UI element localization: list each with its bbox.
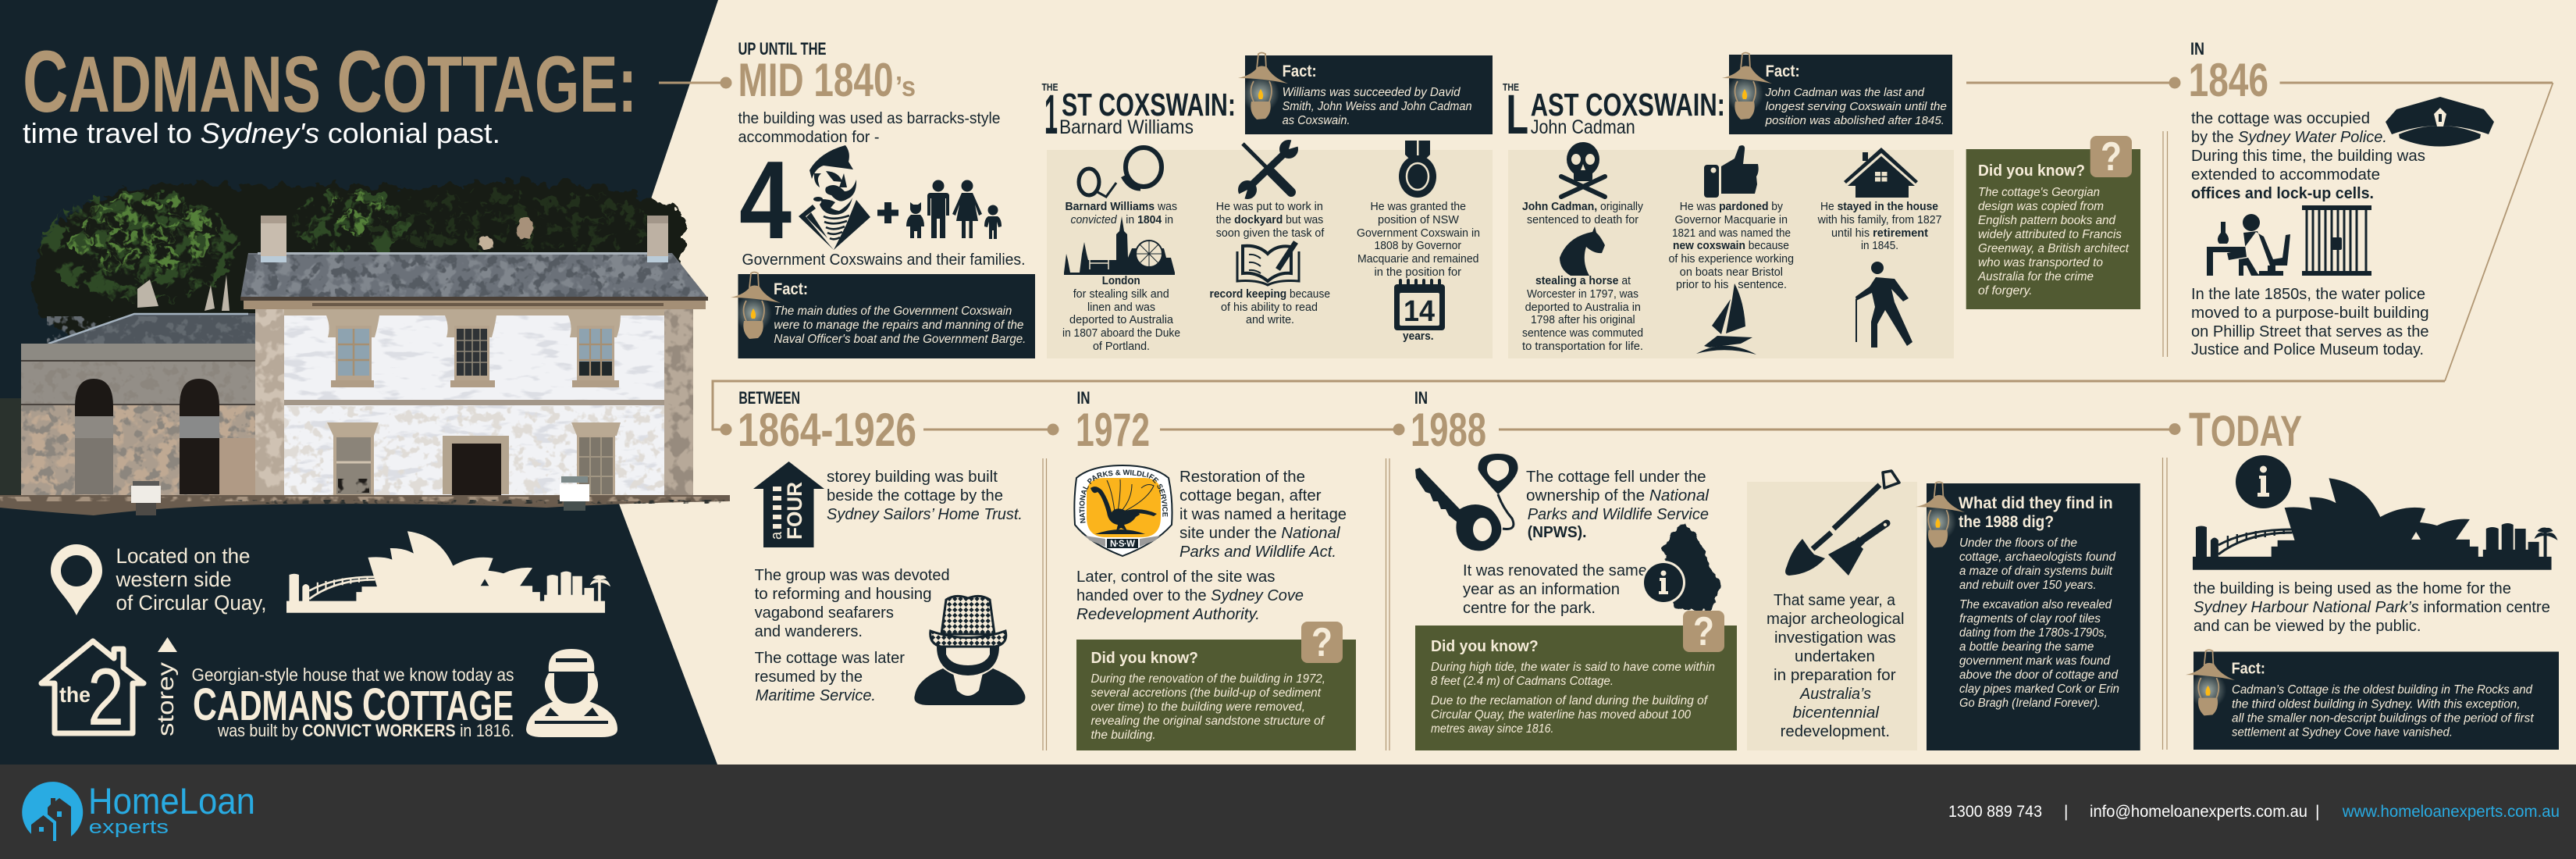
fact box: settlement at Sydney Cove have vanished. xyxy=(2232,726,2453,739)
heading: MID 1840 xyxy=(738,54,893,106)
body text: storey building was built xyxy=(827,468,998,486)
heading xyxy=(1041,81,1236,146)
panel: what did they find: The excavation also revealed xyxy=(1959,598,2112,611)
connector: 1988 to today xyxy=(1499,423,2181,435)
location text: western side xyxy=(116,568,231,591)
body text xyxy=(738,109,1026,269)
panel text: investigation was xyxy=(1774,629,1896,647)
icon: family xyxy=(906,180,1002,239)
body text: centre for the park. xyxy=(1463,599,1596,617)
fact box xyxy=(731,272,1035,358)
did you know: high tide: During high tide, the water is said to have come within xyxy=(1431,661,1715,674)
fact box: Fact: xyxy=(774,280,808,298)
column: pardoned: on boats near Bristol xyxy=(1680,266,1783,279)
heading xyxy=(1411,388,1486,456)
location block xyxy=(51,531,610,615)
fact box: The main duties of the Government Coxswain xyxy=(774,305,1012,318)
heading: Barnard Williams xyxy=(1059,116,1194,138)
icon: question badge: ? xyxy=(2101,134,2122,180)
did you know: high tide: Due to the reclamation of land during the building of xyxy=(1431,694,1709,708)
heading: ST COXSWAIN: xyxy=(1062,87,1236,123)
icon: lantern xyxy=(1238,53,1288,119)
body text: by the Sydney Water Police. xyxy=(2191,128,2387,146)
heading: TODAY xyxy=(2189,403,2302,456)
dark chevron panel xyxy=(0,0,718,765)
icon: opera house skyline dark xyxy=(2193,478,2558,570)
icon: thumbs up xyxy=(1704,145,1759,198)
footer contact details xyxy=(1948,803,2560,821)
column: granted position: Macquarie and remained xyxy=(1357,253,1478,266)
statement text xyxy=(192,665,514,740)
did you know: accretions: several accretions (the build-up of sediment xyxy=(1091,686,1322,700)
icon: pirate coxswain xyxy=(799,145,870,250)
column: stealing a horse: to transportation for life. xyxy=(1522,340,1643,353)
icon: tree with info xyxy=(1642,523,1720,611)
icon: four storey arrow: FOUR xyxy=(783,482,806,540)
column: convicted: deported to Australia xyxy=(1069,314,1174,326)
did you know: accretions: During the renovation of the building in 1972, xyxy=(1091,672,1325,686)
title: CADMANS COTTAGE: xyxy=(23,33,637,130)
upper windows xyxy=(331,326,619,387)
body text: ownership of the National xyxy=(1526,487,1710,504)
heading: IN xyxy=(1077,388,1090,408)
heading: THE xyxy=(1041,81,1059,93)
fact box: Naval Officer's boat and the Government Barge. xyxy=(774,333,1026,346)
column: dockyard: record keeping because xyxy=(1210,288,1330,301)
column: retirement xyxy=(1817,148,1942,348)
panel text xyxy=(1767,591,1905,740)
section: in 1972 xyxy=(1042,388,1356,750)
heading: AST COXSWAIN: xyxy=(1531,87,1725,123)
statement text: Georgian-style house that we know today as xyxy=(192,665,514,685)
panel: what did they find: and rebuilt over 150 years. xyxy=(1959,579,2097,592)
chimneys xyxy=(261,216,286,262)
body text: Later, control of the site was xyxy=(1076,568,1276,586)
section: in 1988 xyxy=(1386,388,2140,750)
column: granted position: in the position for xyxy=(1374,266,1461,279)
subtitle: time travel to Sydney's colonial past. xyxy=(23,117,500,149)
body text: and wanderers. xyxy=(755,622,863,640)
did you know: georgian design: Australia for the crime xyxy=(1977,270,2094,283)
number 4: 4 xyxy=(739,138,792,262)
body text: accommodation for - xyxy=(738,128,879,146)
column: granted position: 1808 by Governor xyxy=(1374,240,1461,252)
icon: shovel and trowel xyxy=(1785,471,1899,576)
footer bar xyxy=(0,765,2576,859)
footer contact details: | xyxy=(2315,803,2319,821)
column: granted position xyxy=(1357,141,1480,343)
body text xyxy=(1463,468,1710,617)
panel text: Australia’s xyxy=(1799,685,1871,703)
icon: jail bars xyxy=(2302,205,2371,276)
fact box: Cadman’s Cottage is the oldest building in The Rocks and xyxy=(2232,683,2533,697)
did you know: georgian design: who was transported to xyxy=(1978,256,2103,269)
fact box: longest serving Coxswain until the xyxy=(1766,100,1947,113)
statement text: was built by CONVICT WORKERS in 1816. xyxy=(217,721,514,740)
icon: question badge xyxy=(1683,609,1724,654)
did you know: georgian design: Greenway, a British architect xyxy=(1978,242,2129,255)
heading: 1972 xyxy=(1076,404,1150,456)
stable arches xyxy=(75,379,255,496)
heading: THE xyxy=(1503,81,1519,93)
body text: the cottage was occupied xyxy=(2191,109,2370,127)
heading: ’s xyxy=(895,70,916,102)
the 2 label: 2 xyxy=(87,652,124,743)
heading: 1864-1926 xyxy=(738,404,916,456)
location text xyxy=(116,544,267,615)
icon: question badge xyxy=(2090,134,2132,180)
footer contact details: | xyxy=(2064,803,2068,821)
heading: 1988 xyxy=(1411,404,1486,456)
panel: what did they find: a bottle bearing the same xyxy=(1959,640,2094,654)
heading xyxy=(2189,39,2268,106)
body text: beside the cottage by the xyxy=(827,487,1003,504)
the 2 label: the xyxy=(59,683,91,707)
did you know: accretions: revealing the original sandstone structure of xyxy=(1091,715,1325,728)
column: retirement: until his retirement xyxy=(1831,227,1928,240)
icon: map pin xyxy=(51,544,102,615)
body text: In the late 1850s, the water police xyxy=(2191,285,2425,303)
icon: question badge xyxy=(1301,620,1343,665)
heading xyxy=(1503,81,1725,146)
column: convicted: of Portland. xyxy=(1093,340,1150,353)
panel: what did they find: dating from the 1780s-1790s, xyxy=(1959,626,2108,640)
body text: year as an information xyxy=(1463,580,1620,598)
column: convicted: linen and was xyxy=(1087,301,1155,314)
illustration: cottage with trees xyxy=(0,181,730,515)
column: dockyard: the dockyard but was xyxy=(1216,214,1323,226)
icon: question badge: ? xyxy=(1311,620,1332,665)
icon: info circle xyxy=(2236,455,2291,508)
panel: what did they find: Under the floors of the xyxy=(1959,536,2077,550)
column: convicted: convicted in 1804 in xyxy=(1071,214,1173,226)
logo wordmark: HomeLoan xyxy=(88,780,255,822)
fact box: Smith, John Weiss and John Cadman xyxy=(1283,100,1472,113)
body text: During this time, the building was xyxy=(2191,147,2425,165)
body text xyxy=(2194,579,2550,635)
body text: Restoration of the xyxy=(1179,468,1305,486)
timeline connector: upper row to lower row xyxy=(713,77,2553,436)
panel: what did they find xyxy=(1916,482,2140,750)
fact box: Fact: xyxy=(2232,661,2265,678)
column: stealing a horse: stealing a horse at xyxy=(1535,275,1631,287)
column: granted position: years. xyxy=(1403,330,1433,343)
column: granted position: He was granted the xyxy=(1371,201,1466,213)
column: pardoned: of his experience working xyxy=(1669,253,1794,266)
logo: national parks and wildlife service: NATIONAL PARKS & WILDLIFE SERVICE xyxy=(1079,470,1168,523)
body text: The cottage was later xyxy=(755,649,905,667)
panel: what did they find: clay pipes marked Cork or Erin xyxy=(1959,683,2119,696)
icon: house xyxy=(1844,148,1918,198)
plus sign xyxy=(877,202,898,223)
panel: what did they find: above the door of cottage and xyxy=(1959,668,2119,682)
fact box: as Coxswain. xyxy=(1283,114,1350,127)
icon: house outline xyxy=(41,641,144,733)
icon: handcuffs xyxy=(1079,148,1162,197)
column: dockyard: of his ability to read xyxy=(1221,301,1318,314)
column: stealing a horse xyxy=(1522,142,1644,353)
did you know: accretions xyxy=(1076,620,1356,750)
column: convicted: Barnard Williams was xyxy=(1065,201,1177,213)
did you know: georgian design: The cottage's Georgian xyxy=(1978,186,2100,199)
body text: extended to accommodate xyxy=(2191,166,2380,184)
column: dockyard: He was put to work in xyxy=(1216,201,1323,213)
column: stealing a horse: John Cadman, originally xyxy=(1522,201,1644,213)
fact box: Fact: xyxy=(1283,62,1317,80)
panel: archeological investigation xyxy=(1747,471,1917,750)
icon: convict xyxy=(526,649,617,737)
panel: what did they find: fragments of clay roof tiles xyxy=(1959,612,2101,626)
body text: Government Coxswains and their families. xyxy=(742,251,1026,269)
logo wordmark: experts xyxy=(89,817,169,838)
heading: UP UNTIL THE xyxy=(738,39,826,59)
panel: what did they find: government mark was found xyxy=(1959,654,2111,668)
location text: of Circular Quay, xyxy=(116,591,267,615)
heading: 1846 xyxy=(2189,54,2268,106)
body text: The cottage fell under the xyxy=(1526,468,1706,486)
icon: lantern xyxy=(1722,53,1772,119)
icon: london skyline xyxy=(1064,216,1175,275)
storey arrow xyxy=(153,637,179,736)
icon: horse head xyxy=(1560,226,1605,276)
did you know: georgian design: English pattern books and xyxy=(1978,214,2116,227)
lower windows and door xyxy=(327,422,621,496)
body text xyxy=(2191,109,2429,358)
fact box xyxy=(1238,53,1493,134)
panel background xyxy=(1047,150,1493,358)
two storey house statement xyxy=(41,637,617,743)
did you know: georgian design: Did you know? xyxy=(1978,162,2085,180)
fact box: were to manage the repairs and manning of the xyxy=(774,319,1024,332)
panel: what did they find: the 1988 dig? xyxy=(1959,513,2054,531)
did you know: high tide: Did you know? xyxy=(1431,638,1539,655)
did you know: high tide: Circular Quay, the waterline has moved about 100 xyxy=(1431,708,1691,722)
body text: the building is being used as the home for the xyxy=(2194,579,2511,597)
fact box: the third oldest building in Sydney. With this exception, xyxy=(2232,698,2521,711)
panel: what did they find: cottage, archaeologists found xyxy=(1959,551,2116,564)
logo: national parks and wildlife service xyxy=(1073,465,1172,558)
icon: police cap xyxy=(2386,97,2494,147)
column: convicted xyxy=(1062,148,1180,353)
section: in 1846 xyxy=(2163,39,2494,358)
did you know: georgian design: design was copied from xyxy=(1978,200,2104,213)
icon: book and pencil xyxy=(1237,242,1299,285)
icon: opera house skyline light xyxy=(286,531,610,613)
icon: question badge: ? xyxy=(1693,609,1714,654)
did you know: georgian design xyxy=(1966,134,2140,309)
column: dockyard: and write. xyxy=(1246,314,1294,326)
section: today xyxy=(2162,403,2559,750)
column: pardoned: He was pardoned by xyxy=(1680,201,1784,213)
ground xyxy=(0,495,730,515)
section: between 1864-1926 xyxy=(738,388,1025,705)
column: dockyard: soon given the task of xyxy=(1216,227,1325,240)
body text: The group was was devoted xyxy=(755,566,950,584)
the 2 label xyxy=(59,652,124,743)
section: first coxswain xyxy=(1041,53,1493,358)
body text: Sydney Sailors’ Home Trust. xyxy=(827,505,1023,523)
panel text: undertaken xyxy=(1795,647,1875,665)
body text: Redevelopment Authority. xyxy=(1076,605,1260,623)
column: pardoned xyxy=(1669,145,1794,355)
column: pardoned: 1821 and was named the xyxy=(1672,227,1791,240)
column: stealing a horse: sentence was commuted xyxy=(1522,327,1643,340)
heading xyxy=(738,388,916,456)
column: granted position: Government Coxswain in xyxy=(1357,227,1480,240)
connector: 1972 to 1988 xyxy=(1160,423,1405,436)
icon: four storey arrow xyxy=(753,462,824,547)
body text: to reforming and housing xyxy=(755,585,932,603)
body text xyxy=(755,468,1023,704)
statement text: CADMANS COTTAGE xyxy=(193,679,514,730)
panel text: bicentennial xyxy=(1793,704,1880,722)
main building walls xyxy=(255,309,693,496)
icon: man at desk xyxy=(2207,214,2290,276)
body text: Parks and Wildlife Act. xyxy=(1179,543,1336,561)
column: stealing a horse: deported to Australia in xyxy=(1525,301,1641,314)
body text: resumed by the xyxy=(755,668,863,686)
column: pardoned: prior to his sentence. xyxy=(1676,279,1787,291)
did you know: high tide: metres away since 1816. xyxy=(1431,722,1553,736)
heading xyxy=(1076,388,1150,456)
body text: It was renovated the same xyxy=(1463,561,1647,579)
fact box: Fact: xyxy=(1766,62,1800,80)
icon: calendar 14: 14 xyxy=(1404,295,1435,328)
icon: lantern xyxy=(1916,482,1965,547)
section: last coxswain xyxy=(1503,53,1954,358)
connector: title to timeline xyxy=(659,77,732,89)
icon: skull and crossbones xyxy=(1561,142,1605,197)
footer contact details: info@homeloanexperts.com.au xyxy=(2090,803,2307,821)
column: convicted: in 1807 aboard the Duke xyxy=(1062,327,1180,340)
fact box xyxy=(2186,650,2559,750)
body text: site under the National xyxy=(1179,524,1341,542)
panel text: in preparation for xyxy=(1774,666,1896,684)
icon: walking man xyxy=(1856,262,1912,348)
column: stealing a horse: Worcester in 1797, was xyxy=(1527,288,1638,301)
heading: IN xyxy=(2190,39,2204,59)
location text: Located on the xyxy=(116,544,250,568)
column: granted position: position of NSW xyxy=(1378,214,1459,226)
connector: 1864 to 1972 xyxy=(923,423,1059,436)
body text: Sydney Harbour National Park’s information centre xyxy=(2194,598,2550,616)
did you know: high tide: 8 feet (2.4 m) of Cadmans Cottage. xyxy=(1431,675,1614,688)
heading: John Cadman xyxy=(1531,116,1635,138)
heading: BETWEEN xyxy=(738,388,800,408)
icon: key and pin xyxy=(1415,454,1518,551)
body text: Maritime Service. xyxy=(756,686,876,704)
column: retirement: with his family, from 1827 xyxy=(1817,214,1942,226)
icon: four storey arrow: a xyxy=(768,531,785,540)
body text: Justice and Police Museum today. xyxy=(2191,340,2424,358)
panel: what did they find: Go Bragh (Ireland Forever). xyxy=(1959,697,2101,710)
body text: and can be viewed by the public. xyxy=(2194,617,2421,635)
icon: seafarer with hat xyxy=(914,596,1025,705)
column: stealing a horse: 1798 after his original xyxy=(1531,314,1635,326)
did you know: georgian design: widely attributed to Francis xyxy=(1978,228,2122,241)
logo: national parks and wildlife service: N·S·W xyxy=(1110,540,1135,549)
column: convicted: for stealing silk and xyxy=(1073,288,1169,301)
storey arrow: storey xyxy=(153,662,179,736)
roof xyxy=(240,253,708,298)
body text xyxy=(1076,468,1347,623)
heading: 1 xyxy=(1044,84,1058,146)
panel: what did they find: a maze of drain systems built xyxy=(1959,565,2113,578)
panel text: That same year, a xyxy=(1774,591,1896,609)
body text: vagabond seafarers xyxy=(755,604,894,622)
column: pardoned: Governor Macquarie in xyxy=(1675,214,1788,226)
fact box: all the smaller non-descript buildings of the period of first xyxy=(2232,712,2534,725)
icon: wrench and screwdriver xyxy=(1236,138,1302,200)
body text: (NPWS). xyxy=(1528,523,1586,541)
body text: moved to a purpose-built building xyxy=(2191,304,2429,322)
icon: lantern xyxy=(2186,650,2235,715)
footer contact details: 1300 889 743 xyxy=(1948,803,2042,821)
did you know: accretions: over time) to the building were removed, xyxy=(1091,700,1305,714)
fact box: position was abolished after 1845. xyxy=(1765,114,1944,127)
panel text: redevelopment. xyxy=(1781,722,1890,740)
fact box: Williams was succeeded by David xyxy=(1283,86,1461,99)
section: up until the mid 1840s xyxy=(731,39,1035,358)
column: convicted: London xyxy=(1102,275,1140,287)
panel text: major archeological xyxy=(1767,610,1905,628)
icon: medal xyxy=(1399,141,1436,198)
icon: house in blue circle xyxy=(22,782,83,841)
footer contact details: www.homeloanexperts.com.au xyxy=(2342,803,2560,821)
heading: IN xyxy=(1414,388,1428,408)
icon: calendar 14 xyxy=(1394,280,1445,330)
fact box xyxy=(1722,53,1952,134)
panel background xyxy=(1508,150,1954,358)
panel: what did they find: What did they find in xyxy=(1959,494,2113,512)
did you know: georgian design: of forgery. xyxy=(1978,284,2033,298)
heading: L xyxy=(1507,84,1528,146)
icon: sailboat xyxy=(1696,283,1756,355)
body text: it was named a heritage xyxy=(1179,505,1347,523)
did you know: high tide xyxy=(1415,609,1737,750)
body text: offices and lock-up cells. xyxy=(2191,184,2374,202)
column: retirement: He stayed in the house xyxy=(1820,201,1938,213)
did you know: accretions: the building. xyxy=(1091,729,1156,742)
column: pardoned: new coxswain because xyxy=(1673,240,1789,252)
logo wordmark xyxy=(88,780,255,838)
body text: on Phillip Street that serves as the xyxy=(2191,323,2429,340)
body text: Parks and Wildlife Service xyxy=(1528,505,1709,523)
column: retirement: in 1845. xyxy=(1861,240,1898,252)
body text: cottage began, after xyxy=(1179,487,1322,504)
body text: the building was used as barracks-style xyxy=(738,109,1001,127)
did you know: accretions: Did you know? xyxy=(1091,650,1198,667)
fact box: John Cadman was the last and xyxy=(1765,86,1925,99)
footer logo xyxy=(22,780,255,841)
bins xyxy=(131,476,589,515)
body text: handed over to the Sydney Cove xyxy=(1076,586,1304,604)
wing xyxy=(47,313,255,344)
column: dockyard xyxy=(1210,138,1330,326)
icon: lantern xyxy=(731,272,781,339)
column: stealing a horse: sentenced to death for xyxy=(1527,214,1638,226)
